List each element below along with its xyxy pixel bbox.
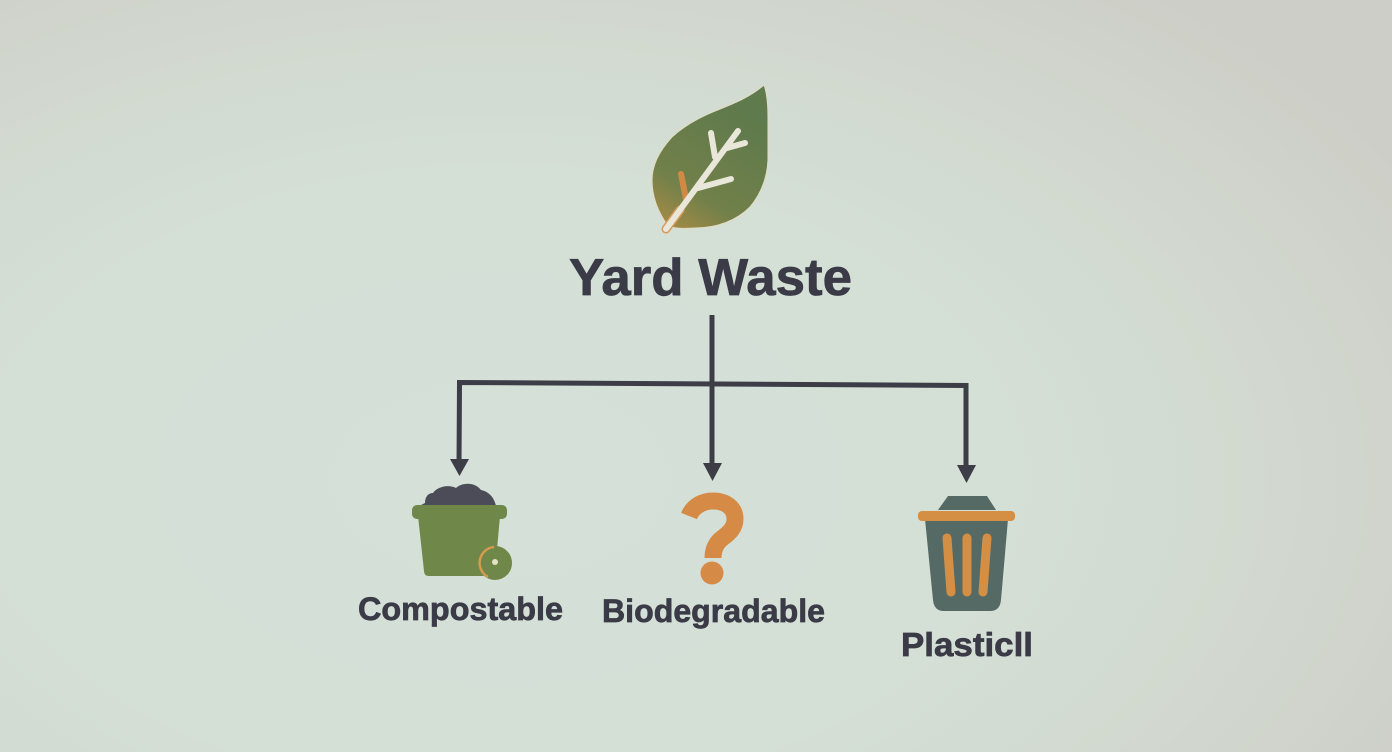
- trash bars: [947, 538, 987, 592]
- icon: compost bin: [412, 484, 512, 580]
- compost soil: [419, 484, 496, 506]
- trash lid: [938, 496, 996, 510]
- bin rim: [412, 505, 507, 519]
- trash rim: [918, 511, 1015, 521]
- bin body: [418, 516, 500, 576]
- connector: trunk to middle arrow: [710, 315, 714, 468]
- label: biodegradable: Biodegradable: [602, 593, 825, 629]
- icon: trash can: [918, 496, 1015, 611]
- flowchart arrows: [450, 315, 976, 483]
- arrow: left head: [450, 459, 469, 476]
- label: plastic: Plasticll: [901, 626, 1033, 663]
- label: compostable: Compostable: [358, 591, 563, 627]
- arrow: middle head: [703, 463, 722, 481]
- arrow: right head: [957, 465, 976, 483]
- icon: leaf stem and branches: [666, 131, 745, 229]
- title: Yard Waste: [569, 249, 852, 307]
- trash body: [925, 519, 1008, 611]
- icon: leaf orange vein: [681, 174, 686, 199]
- small compost badge: [478, 546, 512, 580]
- icon: question mark: [689, 501, 735, 584]
- connector: horizontal bar and side drops: [459, 382, 966, 470]
- icon: leaf stem base outline: [666, 210, 680, 229]
- icon: leaf: [652, 85, 768, 229]
